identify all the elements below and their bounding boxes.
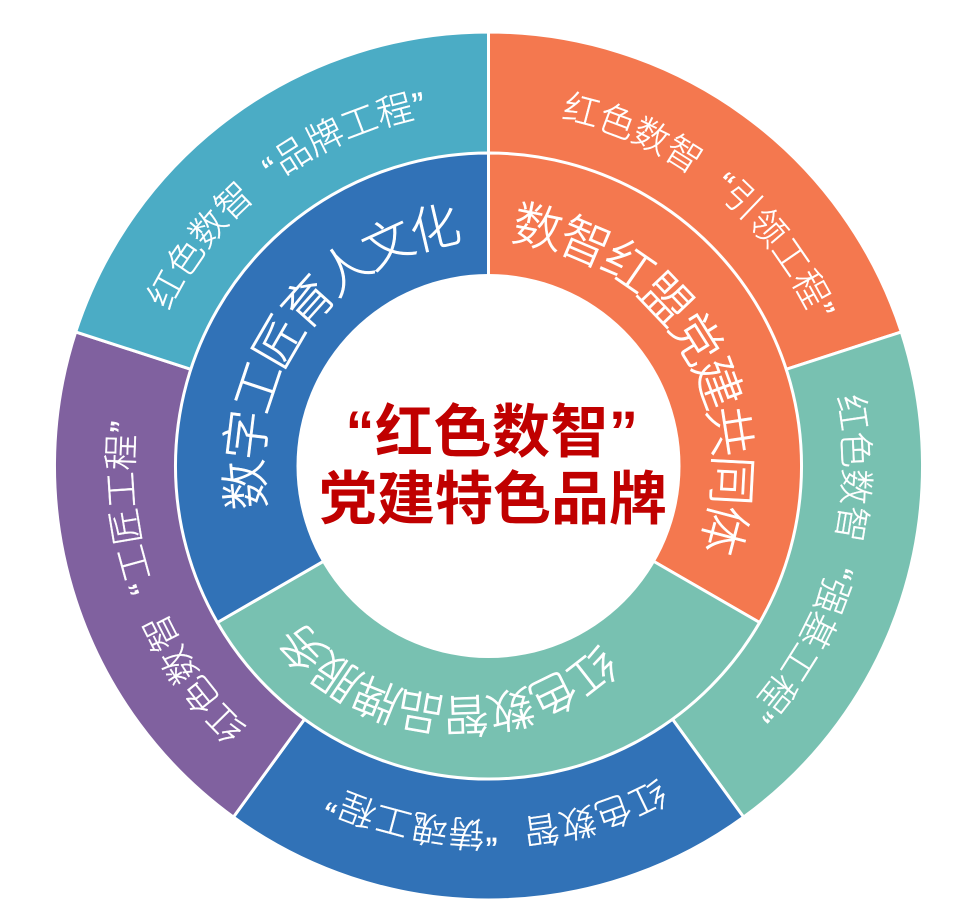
label: 数字工匠育人文化: 数字工匠育人文化 bbox=[221, 204, 460, 508]
panel: outer segment blue bbox=[236, 720, 744, 898]
label: 红色数智品牌服务: 红色数智品牌服务 bbox=[280, 626, 614, 738]
title: 党建特色品牌 bbox=[319, 467, 667, 532]
label: 品牌工程: 红色数智 “品牌工程” bbox=[146, 92, 422, 310]
label: 工匠工程: 红色数智 “工匠工程” bbox=[104, 422, 246, 742]
panel: outer segment teal bbox=[674, 331, 921, 815]
label: 引领工程: 红色数智 “引领工程” bbox=[562, 91, 835, 312]
panel: centre circle bbox=[296, 274, 680, 658]
title bbox=[319, 400, 667, 532]
label: 强基工程: 红色数智 “强基工程” bbox=[756, 395, 874, 724]
panel: outer segment purple bbox=[56, 334, 305, 817]
panel: outer segment orange bbox=[490, 34, 900, 368]
panel: outer segment cyan bbox=[76, 34, 487, 370]
panel: middle segment teal bbox=[216, 560, 762, 780]
title: “红色数智” bbox=[345, 400, 639, 465]
label: 数智红盟党建共同体: 数智红盟党建共同体 bbox=[512, 201, 755, 556]
panel: middle segment blue bbox=[174, 152, 487, 624]
panel: middle segment orange bbox=[490, 152, 803, 624]
label: 铸魂工程: 红色数智 “铸魂工程” bbox=[325, 778, 665, 852]
